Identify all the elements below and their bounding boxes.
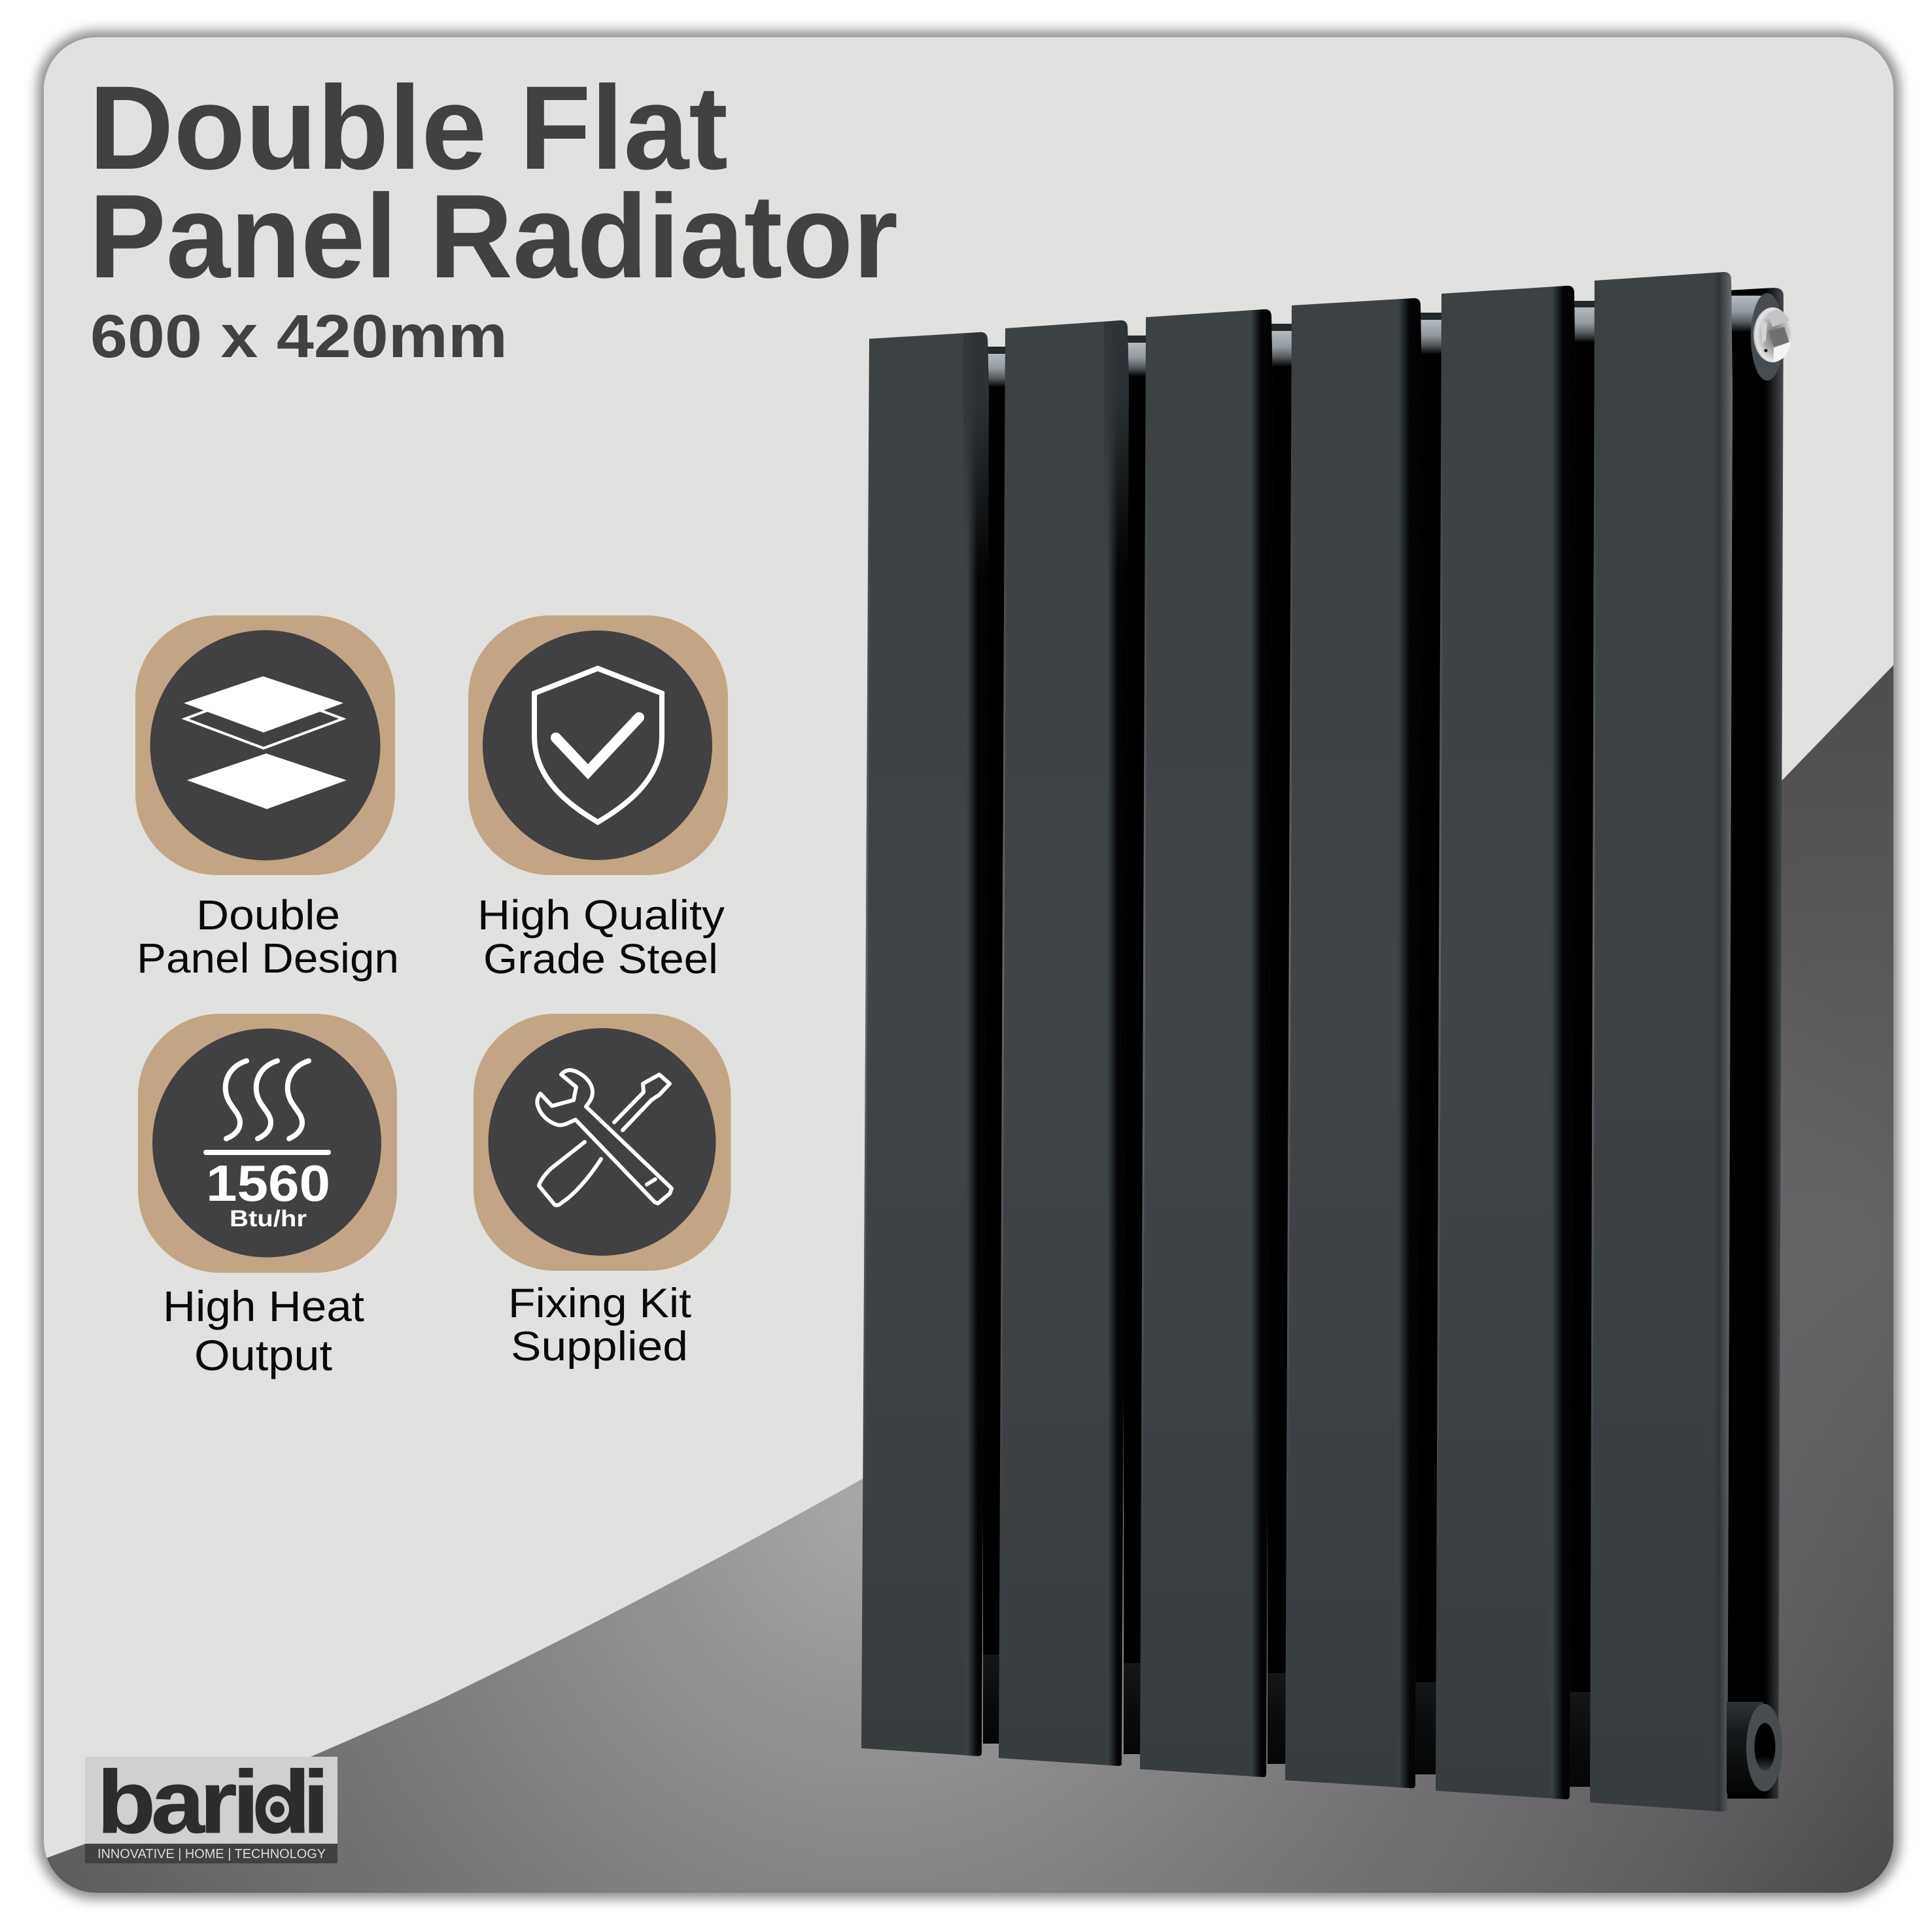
output value: 1560 <box>206 1154 330 1212</box>
feature: high quality grade steel <box>468 615 728 982</box>
label: Output <box>194 1331 332 1379</box>
feature: double panel design <box>135 615 399 982</box>
tagline: INNOVATIVE | HOME | TECHNOLOGY <box>97 1847 326 1861</box>
logo d ring <box>259 1789 296 1831</box>
icon: shield with check <box>534 668 662 822</box>
icon: chrome valve bolt <box>1751 293 1791 381</box>
tagline bar <box>85 1844 337 1863</box>
title line 1: Double Flat <box>89 61 728 194</box>
panel 3 <box>1140 309 1273 1777</box>
label: Grade Steel <box>483 935 718 982</box>
panel 6 <box>1590 272 1733 1812</box>
gaps between panels with pipes <box>983 301 1597 1787</box>
feature: fixing kit supplied <box>474 1014 731 1370</box>
logo background <box>85 1757 337 1844</box>
dark floor wedge <box>39 665 1893 1897</box>
label <box>137 891 399 982</box>
bottom right pipe end <box>1727 1702 1782 1793</box>
panel 2 <box>999 320 1129 1766</box>
label <box>163 1282 364 1379</box>
label <box>508 1281 692 1370</box>
title line 2: Panel Radiator <box>89 169 898 303</box>
icon badge tan <box>474 1014 731 1271</box>
icon circle <box>488 1028 716 1256</box>
icon circle <box>152 1028 381 1257</box>
label <box>477 891 725 982</box>
unit: Btu/hr <box>230 1206 307 1232</box>
panel 5 <box>1436 286 1576 1799</box>
radiator product image <box>861 272 1791 1812</box>
panel 1 <box>861 332 989 1756</box>
icon badge tan <box>468 615 728 875</box>
icon: wrench and screwdriver <box>537 1070 672 1205</box>
back rail and valve side <box>1727 288 1784 1799</box>
icon badge tan <box>138 1014 397 1273</box>
icon: heat waves <box>206 1061 328 1152</box>
label: Fixing Kit <box>508 1281 692 1326</box>
logo wordmark: baridi <box>97 1752 330 1852</box>
label: Panel Design <box>137 935 399 982</box>
logo: baridi <box>85 1752 337 1863</box>
size subtitle: 600 x 420mm <box>90 302 508 370</box>
icon badge tan <box>135 615 395 875</box>
feature: high heat output <box>138 1014 397 1379</box>
icon circle <box>483 630 712 860</box>
label: Double <box>196 891 340 939</box>
label: Supplied <box>511 1324 688 1370</box>
icon circle <box>150 630 381 861</box>
label: High Quality <box>477 891 725 939</box>
title <box>89 61 898 370</box>
icon: stacked panels <box>184 676 347 809</box>
panel 4 <box>1285 298 1422 1788</box>
label: High Heat <box>163 1282 364 1330</box>
